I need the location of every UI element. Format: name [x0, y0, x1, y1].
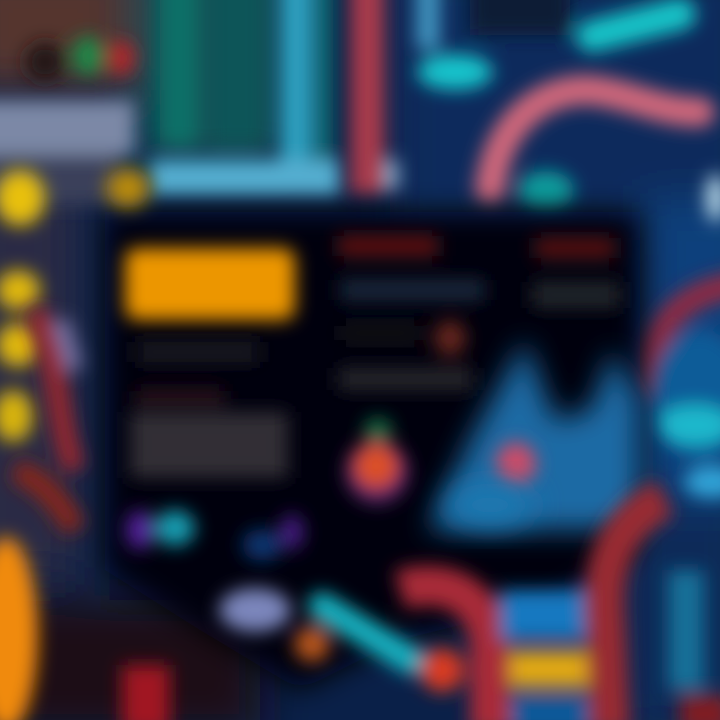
pink arc — [490, 90, 700, 211]
top-left shelf with indicator lights — [25, 36, 134, 82]
blue area chart — [428, 340, 640, 530]
middle column text lines — [338, 236, 485, 390]
left text lines — [130, 342, 288, 478]
lower legend dots — [126, 510, 304, 561]
red column — [350, 0, 399, 195]
left edge red cable — [15, 310, 75, 530]
grey-blue band — [0, 100, 135, 205]
right column text lines — [532, 238, 620, 308]
dark dashboard panel — [105, 212, 640, 690]
bottom cables and accents — [219, 498, 720, 720]
orange header block — [125, 248, 295, 320]
left edge yellow lights — [0, 168, 150, 442]
teal and light blue columns — [150, 0, 340, 196]
small round gauge — [345, 418, 409, 504]
top-right cyan bars — [416, 0, 680, 90]
right side arc and cyan shapes — [648, 174, 720, 498]
orange glow lower left — [0, 537, 170, 720]
